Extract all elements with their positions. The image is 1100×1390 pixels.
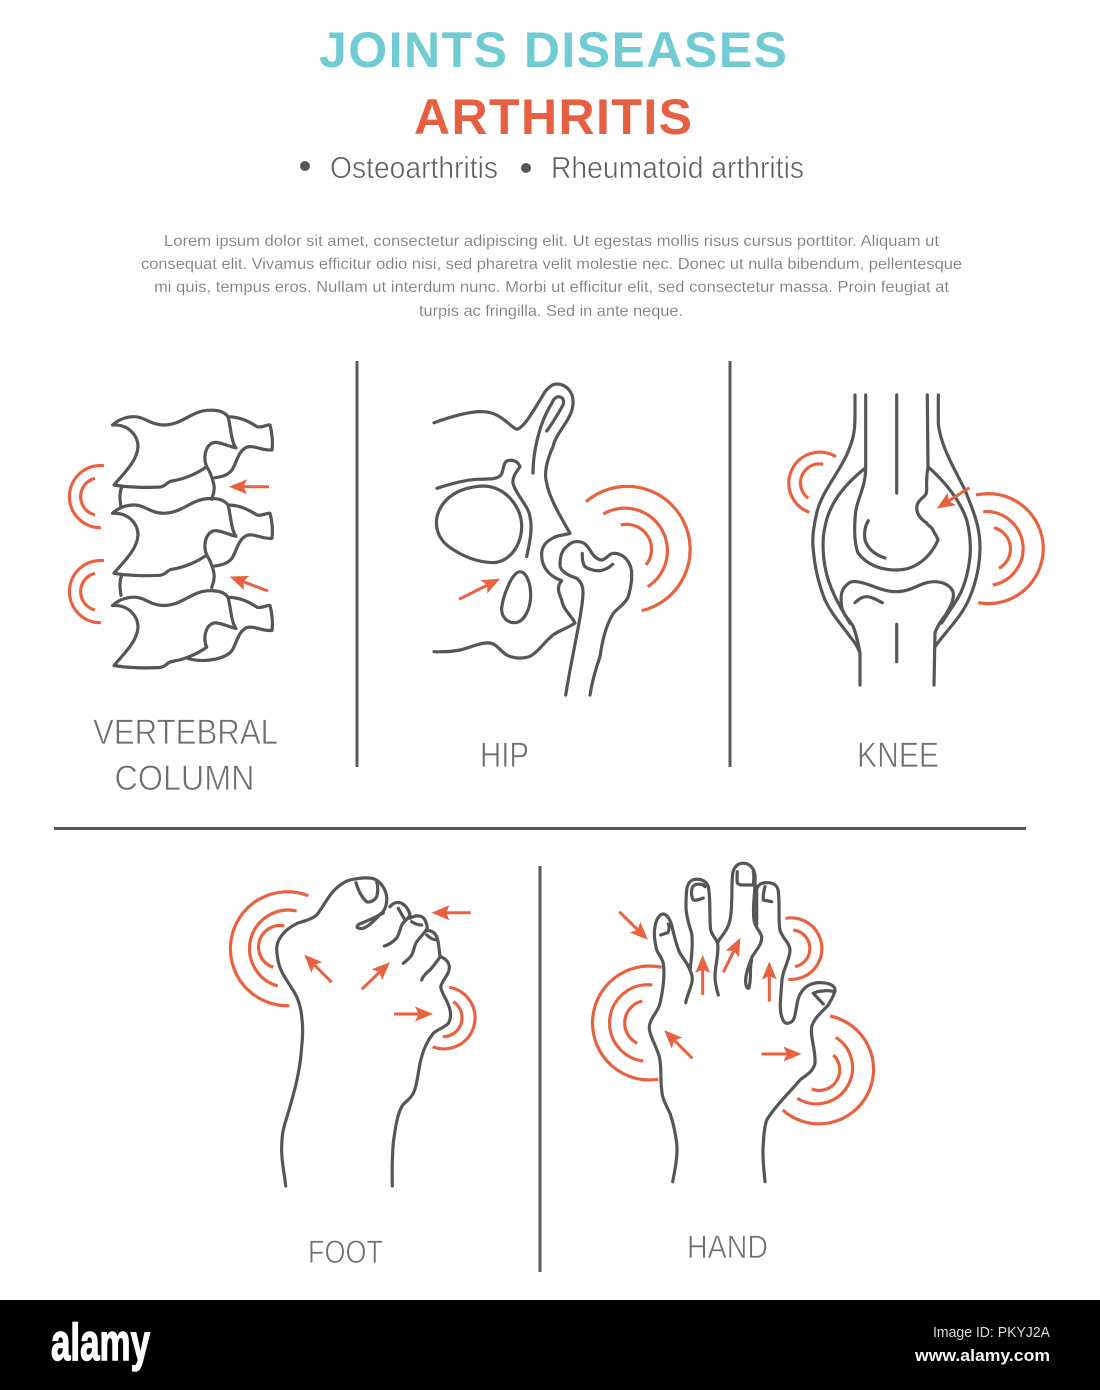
label: hip: HIP [480, 736, 529, 775]
foot illustration [277, 878, 451, 1186]
panel: hand [593, 863, 874, 1265]
logo: alamy: alamy [51, 1314, 150, 1372]
label: foot: FOOT [308, 1234, 383, 1270]
arrows [619, 912, 798, 1058]
pain arcs [789, 452, 1043, 604]
subtitle: arthritis: ARTHRITIS [414, 89, 692, 145]
label: knee: KNEE [857, 736, 939, 775]
title [319, 22, 787, 145]
pain arcs [69, 466, 104, 623]
arrow [459, 580, 496, 599]
pain arcs [586, 486, 690, 611]
panel: foot [230, 878, 475, 1270]
label: vertebral column: VERTEBRAL [93, 713, 278, 752]
title: JOINTS DISEASES [319, 22, 787, 78]
panel: vertebral column [69, 410, 278, 798]
arrows [307, 913, 471, 1014]
arthritis types list: Osteoarthritis [330, 150, 498, 185]
watermark bar [0, 1300, 1100, 1390]
hip bone illustration [434, 384, 632, 695]
pain arcs [593, 918, 874, 1124]
intro text block: turpis ac fringilla. Sed in ante neque. [419, 303, 683, 320]
image id: Image ID: PKYJ2A [933, 1324, 1050, 1341]
intro text block: mi quis, tempus eros. Nullam ut interdum nunc. Morbi ut efficitur elit, sed consectetur massa. Proin feugiat at [154, 279, 950, 296]
intro text block [141, 233, 962, 320]
arthritis types list: Rheumatoid arthritis [551, 150, 804, 185]
website: www.alamy.com [914, 1346, 1050, 1365]
label: hand: HAND [687, 1229, 768, 1265]
intro text block: consequat elit. Vivamus efficitur odio nisi, sed pharetra velit molestie nec. Donec ut nulla bibendum, pellentesque [141, 256, 962, 273]
arthritis types list [300, 150, 804, 185]
panel: knee [789, 395, 1043, 775]
label: vertebral column: COLUMN [114, 759, 254, 798]
vertebrae illustration [112, 410, 272, 668]
pain arcs [230, 892, 475, 1049]
arrows [233, 487, 269, 591]
label: vertebral column [93, 713, 278, 798]
knee joint illustration [813, 395, 980, 685]
arrow [940, 488, 969, 506]
panel: hip [434, 384, 690, 775]
hand illustration [649, 863, 835, 1182]
intro text block: Lorem ipsum dolor sit amet, consectetur adipiscing elit. Ut egestas mollis risus cursus porttitor. Aliquam ut [164, 233, 940, 250]
